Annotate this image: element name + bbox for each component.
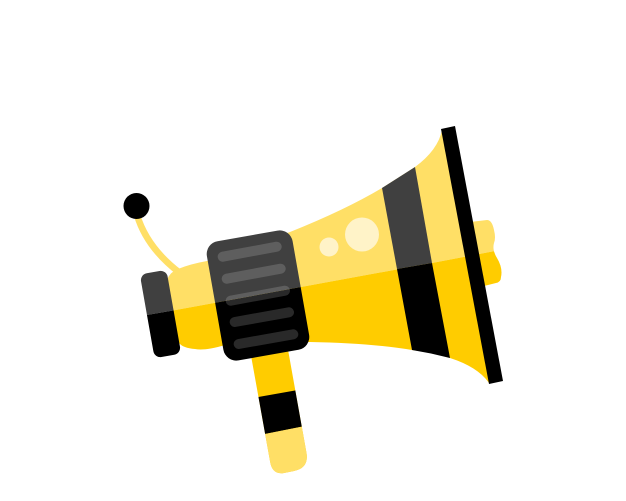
illustration: megaphone — [124, 126, 503, 474]
horn dark band — [382, 167, 450, 358]
highlight: small bubble — [320, 238, 338, 256]
horn rim — [441, 126, 503, 384]
horn body: upper light half — [168, 132, 495, 310]
highlight: large bubble — [345, 218, 379, 252]
grip — [205, 228, 311, 363]
grip ridges — [223, 247, 293, 344]
back cap — [140, 270, 181, 358]
horn body: lower saturated half — [174, 251, 502, 383]
handle — [252, 352, 307, 474]
microphone ball — [124, 193, 150, 219]
microphone cord — [137, 215, 180, 273]
